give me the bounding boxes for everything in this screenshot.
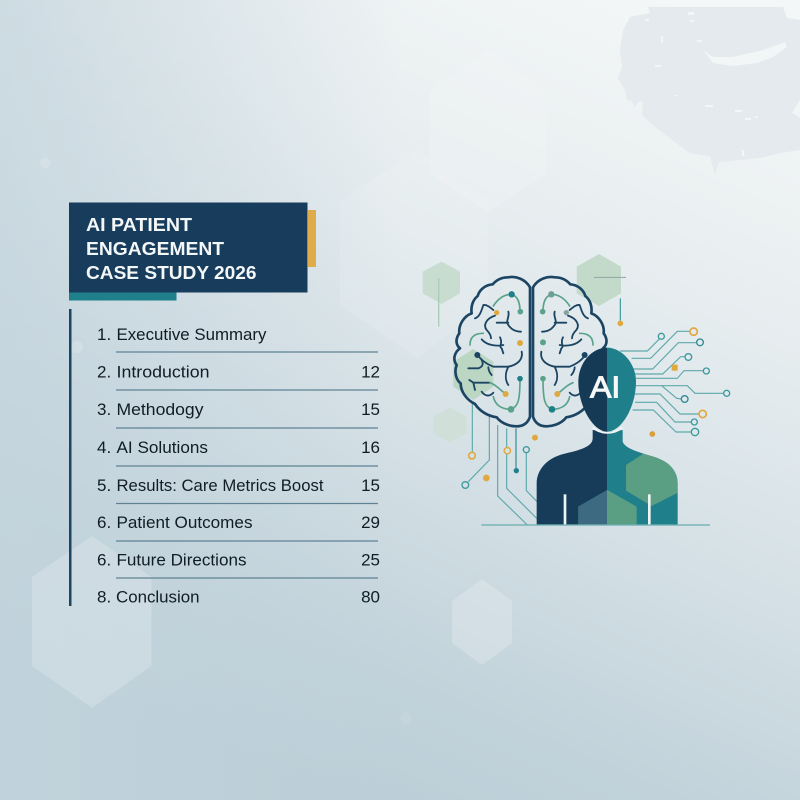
contents rows: 5. bbox=[97, 476, 111, 495]
decorative green hexagons bbox=[423, 254, 626, 443]
contents rows: 1. bbox=[97, 325, 111, 344]
contents rows: 8. bbox=[97, 588, 111, 606]
face: teal half bbox=[607, 348, 636, 432]
face: navy half bbox=[578, 348, 607, 432]
title banner bbox=[69, 202, 316, 300]
background hexagons bbox=[32, 50, 547, 724]
white chest lines bbox=[564, 494, 566, 525]
page numbers: 25 bbox=[361, 550, 380, 570]
contents rows: Results: Care Metrics Boost bbox=[116, 476, 324, 495]
accent: teal underline bbox=[69, 292, 176, 300]
page numbers: 15 bbox=[361, 476, 380, 495]
brain left hemisphere bbox=[454, 277, 530, 426]
contents rows: 6. bbox=[97, 550, 111, 570]
contents rows: 6. bbox=[97, 513, 111, 532]
page numbers: 12 bbox=[361, 362, 380, 382]
contents rows: Introduction bbox=[116, 362, 210, 382]
contents rows: Patient Outcomes bbox=[116, 513, 252, 532]
top-right pale map-like silhouette bbox=[618, 7, 800, 175]
page numbers: 29 bbox=[361, 513, 380, 532]
title text: AI PATIENT bbox=[86, 214, 193, 235]
contents rows: Future Directions bbox=[116, 550, 246, 570]
neck highlight bbox=[593, 427, 623, 433]
contents rows: 3. bbox=[97, 400, 111, 419]
circuit lines: right side bbox=[617, 298, 730, 437]
body: navy half bbox=[537, 430, 607, 525]
body: teal half bbox=[607, 430, 678, 525]
brain right hemisphere bbox=[533, 277, 609, 426]
contents rows: Methodogy bbox=[116, 400, 204, 419]
title text: CASE STUDY 2026 bbox=[86, 262, 256, 283]
human figure bbox=[481, 348, 710, 527]
circuit lines: lower left bbox=[462, 403, 560, 525]
illustration: AI brain and human figure bbox=[423, 254, 730, 527]
accent: orange tab bbox=[308, 210, 316, 267]
contents rows bbox=[97, 325, 324, 606]
page numbers: 15 bbox=[361, 400, 380, 419]
AI label: AI bbox=[590, 370, 620, 404]
table of contents bbox=[69, 309, 380, 606]
contents rows: Conclusion bbox=[116, 588, 200, 606]
contents rows: 4. bbox=[97, 438, 111, 457]
contents rows: AI Solutions bbox=[116, 438, 208, 457]
ground line bbox=[481, 524, 710, 526]
page numbers bbox=[361, 362, 380, 606]
row dividers bbox=[116, 352, 378, 578]
vertical rule bbox=[69, 309, 72, 606]
page numbers: 80 bbox=[361, 588, 380, 606]
page numbers: 16 bbox=[361, 438, 380, 457]
banner background bbox=[69, 202, 308, 292]
contents rows: 2. bbox=[97, 362, 111, 382]
contents rows: Executive Summary bbox=[116, 325, 267, 344]
body: green hexagon overlays bbox=[578, 454, 678, 524]
title text bbox=[86, 214, 256, 283]
title text: ENGAGEMENT bbox=[86, 238, 225, 259]
